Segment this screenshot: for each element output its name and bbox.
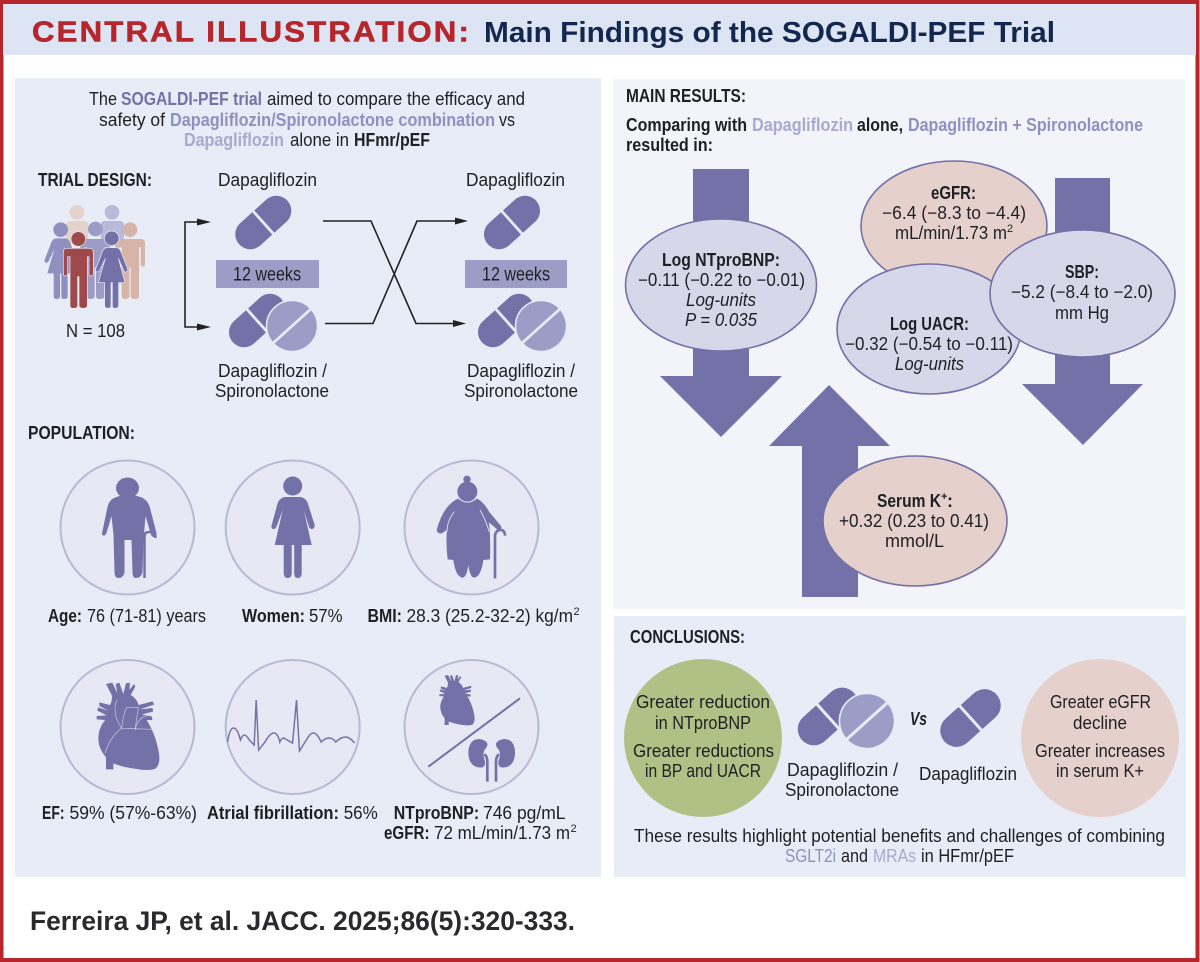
second period: 12 weeks (465, 260, 567, 288)
panel: trial design and population (15, 78, 601, 877)
second period: dapagliflozin: Dapagliflozin (466, 170, 565, 190)
versus label: Vs (910, 709, 927, 729)
dapagliflozin alone (919, 681, 1017, 784)
second period: combination (464, 286, 579, 401)
intro text: HFmr/pEF (354, 130, 430, 150)
first period: dapagliflozin (218, 170, 317, 257)
first period: dapagliflozin: Dapagliflozin (218, 170, 317, 190)
result: NTproBNP (626, 219, 816, 351)
arrow: NTproBNP down (660, 169, 782, 437)
result: eGFR: eGFR: (931, 183, 976, 203)
panel: main results (613, 79, 1185, 609)
first period: combination: Spironolactone (215, 381, 329, 401)
closing statement: SGLT2i (785, 846, 836, 866)
result: eGFR: mL/min/1.73 m (895, 223, 1007, 243)
population: NTproBNP and eGFR: eGFR: (384, 823, 430, 843)
intro text: alone in (290, 130, 349, 150)
results intro: Comparing with (626, 115, 747, 135)
heading: trial design: TRIAL DESIGN: (38, 170, 152, 190)
population: atrial fibrillation: Atrial fibrillation: (207, 803, 339, 823)
results intro: resulted in: (626, 135, 713, 155)
combination therapy: Dapagliflozin / (787, 760, 898, 780)
result: eGFR (861, 161, 1047, 291)
results intro (626, 115, 1143, 155)
result: eGFR: −6.4 (−8.3 to −4.4) (882, 203, 1026, 223)
population: BMI (368, 460, 580, 626)
intro text: Dapagliflozin/Spironolactone combination (170, 110, 495, 130)
icon: group of patients (45, 205, 145, 308)
closing statement: in HFmr/pEF (921, 846, 1014, 866)
results intro: alone, (857, 115, 903, 135)
population: women (226, 460, 360, 626)
challenges circle: in serum K+ (1056, 761, 1144, 781)
heading: conclusions: CONCLUSIONS: (630, 627, 745, 647)
result: SBP: SBP: (1065, 262, 1099, 282)
intro text: The (89, 89, 117, 109)
first period: 12 weeks (216, 260, 319, 288)
benefits circle: Greater reduction (636, 692, 770, 712)
challenges circle: decline (1073, 713, 1127, 733)
second period: 12 weeks: 12 weeks (482, 264, 550, 286)
first period: combination: Dapagliflozin / (218, 361, 327, 381)
population: NTproBNP and eGFR: NTproBNP: (394, 803, 479, 823)
second period: dapagliflozin (466, 170, 565, 257)
closing statement (634, 826, 1165, 866)
result: SBP (990, 230, 1175, 357)
crossover arrows (323, 218, 468, 327)
title: main findings: Main Findings of the SOGALDI-PEF Trial (484, 17, 1055, 49)
challenges circle (1021, 659, 1179, 817)
result: serum potassium: +0.32 (0.23 to 0.41) (839, 511, 989, 531)
second period: combination: Dapagliflozin / (467, 361, 575, 381)
population: NTproBNP and eGFR: 72 mL/min/1.73 m (434, 823, 570, 843)
result: UACR (837, 264, 1021, 394)
intro text (89, 89, 525, 150)
challenges circle: Greater eGFR (1050, 692, 1151, 712)
population: ejection fraction: 59% (57%-63%) (70, 803, 197, 823)
result: serum potassium: + (941, 491, 947, 503)
result: NTproBNP: −0.11 (−0.22 to −0.01) (638, 270, 805, 290)
results intro: Dapagliflozin + Spironolactone (908, 115, 1143, 135)
population: women: 57% (309, 606, 342, 626)
title: central illustration: CENTRAL ILLUSTRATION: (32, 16, 471, 48)
intro text: Dapagliflozin (184, 130, 284, 150)
benefits circle: in BP and UACR (645, 761, 761, 781)
result: SBP: −5.2 (−8.4 to −2.0) (1011, 282, 1153, 302)
result: serum potassium: mmol/L (885, 531, 944, 551)
result: UACR: Log UACR: (890, 314, 969, 334)
population: NTproBNP and eGFR: 2 (570, 823, 577, 835)
arrow: SBP down (1022, 178, 1143, 445)
result: UACR: −0.32 (−0.54 to −0.11) (845, 334, 1013, 354)
heading: population: POPULATION: (28, 423, 135, 443)
randomisation arrows (185, 218, 211, 330)
population: BMI: BMI: (368, 606, 402, 626)
results intro: Dapagliflozin (752, 115, 853, 135)
closing statement: and (841, 846, 868, 866)
benefits circle: Greater reductions (633, 741, 774, 761)
arrow: serum potassium up (769, 385, 890, 597)
benefits circle: in NTproBNP (655, 713, 751, 733)
population: NTproBNP and eGFR: 746 pg/mL (483, 803, 566, 823)
title band (3, 4, 1196, 55)
benefits circle (624, 659, 782, 817)
population: NTproBNP and eGFR (384, 660, 577, 843)
intro text: vs (499, 110, 515, 130)
result: NTproBNP: P = 0.035 (685, 310, 758, 330)
population: BMI: 2 (574, 606, 580, 618)
intro text: safety of (99, 110, 166, 130)
population: women: Women: (242, 606, 305, 626)
first period: combination (215, 286, 330, 401)
N label: N = 108 (66, 321, 125, 341)
result: NTproBNP: Log-units (686, 290, 756, 310)
challenges circle: Greater increases (1035, 741, 1165, 761)
result: serum potassium: : (947, 491, 953, 511)
population: age: 76 (71-81) years (87, 606, 206, 626)
dapagliflozin alone: Dapagliflozin (919, 764, 1017, 784)
population: atrial fibrillation (207, 660, 378, 823)
population: age: Age: (48, 606, 82, 626)
second period: combination: Spironolactone (464, 381, 578, 401)
population: age (48, 460, 206, 626)
population: BMI: 28.3 (25.2-32-2) kg/m (406, 606, 573, 626)
result: serum potassium (823, 456, 1007, 586)
result: SBP: mm Hg (1055, 303, 1109, 323)
result: serum potassium: Serum K (877, 491, 941, 511)
first period: 12 weeks: 12 weeks (233, 264, 301, 286)
combination therapy: Spironolactone (785, 780, 899, 800)
panel: conclusions (614, 616, 1186, 877)
closing statement: These results highlight potential benefits and challenges of combining (634, 826, 1165, 846)
population: ejection fraction: EF: (42, 803, 64, 823)
intro text: SOGALDI-PEF trial (121, 89, 262, 109)
intro text: aimed to compare the efficacy and (267, 89, 525, 109)
heading: main results: MAIN RESULTS: (626, 86, 746, 106)
result: NTproBNP: Log NTproBNP: (662, 250, 780, 270)
population: ejection fraction (42, 660, 197, 823)
population: atrial fibrillation: 56% (344, 803, 378, 823)
closing statement: MRAs (873, 846, 916, 866)
combination therapy (785, 679, 908, 800)
result: UACR: Log-units (895, 354, 964, 374)
result: eGFR: 2 (1007, 223, 1013, 235)
citation: Ferreira JP, et al. JACC. 2025;86(5):320-333. (30, 906, 575, 936)
